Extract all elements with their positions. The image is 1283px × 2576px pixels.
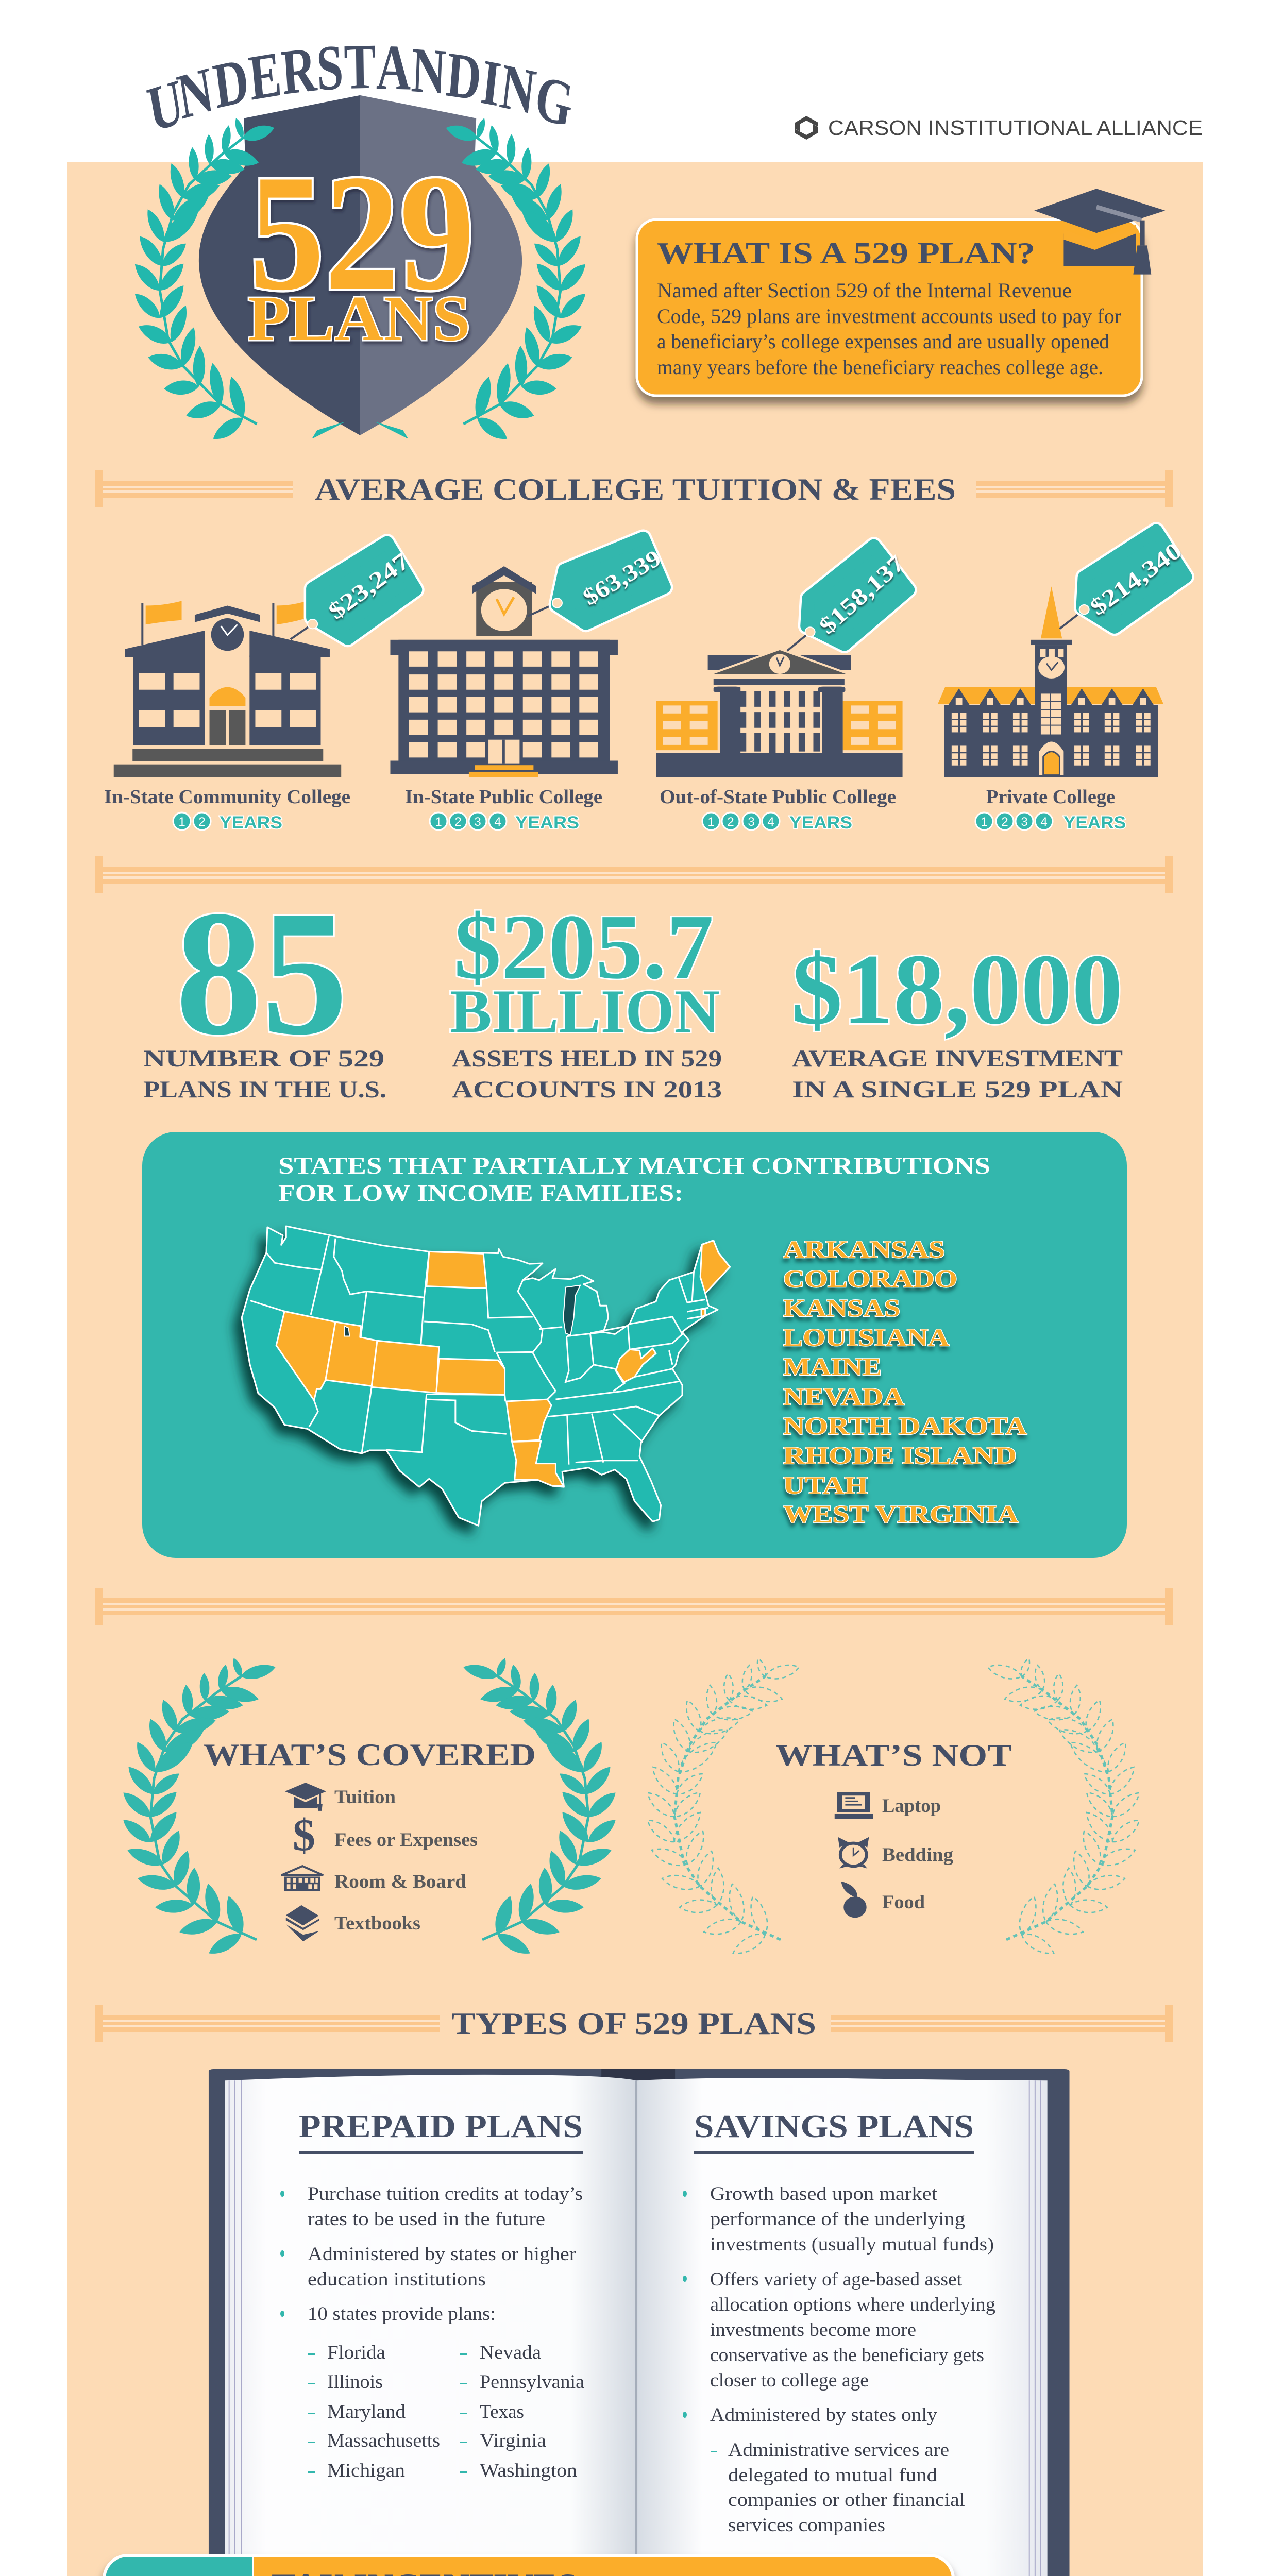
label: ACCOUNTS IN 2013 [452, 1076, 722, 1103]
price tag strings [291, 603, 1084, 651]
page: savings plans [683, 2109, 995, 2536]
divider [95, 470, 1173, 507]
list text: Purchase tuition credits at today’s [308, 2183, 583, 2205]
title badge: Understanding 529 Plans [131, 30, 589, 445]
state borders [250, 1236, 708, 1465]
price tag: $23,247: $23,247 [323, 547, 414, 624]
price tag: $158,137 [805, 546, 909, 645]
list text: Growth based upon market [710, 2183, 938, 2205]
list text: performance of the underlying [710, 2209, 965, 2230]
callout box [637, 219, 1142, 396]
icon: alarm clock [838, 1837, 869, 1869]
body text: a beneficiary’s college expenses and are usually opened [657, 330, 1109, 353]
panel: states map [142, 1132, 1127, 1558]
title number: 529: 529 [249, 140, 475, 325]
box [104, 2555, 953, 2576]
price tag: $63,339 [552, 538, 665, 623]
label: ASSETS HELD IN 529 [452, 1045, 722, 1072]
logo wordmark: CARSON INSTITUTIONAL ALLIANCE [828, 116, 1203, 140]
laurel wreath [131, 117, 589, 445]
section heading: average college tuition and fees [95, 470, 1173, 507]
state plan list: Nevada [480, 2342, 541, 2363]
shield [199, 95, 522, 435]
heading: SAVINGS PLANS [694, 2109, 974, 2144]
body text: Code, 529 plans are investment accounts used to pay for [657, 304, 1121, 328]
years indicators: 3 [1021, 815, 1028, 829]
big number: $18,000 [791, 934, 1123, 1045]
years indicators [173, 812, 1126, 833]
list text: companies or other financial [728, 2489, 965, 2511]
list text: services companies [728, 2515, 885, 2536]
years indicators: 1 [435, 815, 442, 829]
panel: what's not covered [644, 1657, 1143, 1958]
state plan list: Illinois [327, 2371, 383, 2393]
panel: what's covered [120, 1657, 619, 1958]
state list: LOUISIANA [783, 1324, 949, 1351]
item: Bedding: Bedding [882, 1844, 954, 1866]
years indicators: 4 [1040, 815, 1048, 829]
heading: WHAT’S NOT [775, 1738, 1012, 1772]
unit: BILLION [450, 977, 720, 1045]
icon: building [281, 1866, 323, 1891]
college labels: Out-of-State Public College [660, 786, 896, 808]
big number: $205.7 [454, 895, 714, 998]
label [792, 1045, 1123, 1103]
icon: graduation cap [285, 1783, 326, 1811]
statistic: 85 plans [143, 874, 386, 1103]
bullets [280, 2191, 284, 2317]
list text: Administrative services are [728, 2439, 949, 2461]
item: Room and Board: Room & Board [334, 1871, 466, 1892]
body text: Named after Section 529 of the Internal Revenue [657, 279, 1072, 302]
big number: 85 [176, 874, 348, 1072]
label: NUMBER OF 529 [143, 1045, 384, 1072]
statistic: average investment [791, 934, 1123, 1103]
list text [308, 2183, 583, 2325]
list text: delegated to mutual fund [728, 2465, 938, 2486]
icon: graduation cap [1034, 189, 1165, 275]
state plan list: Washington [480, 2460, 577, 2481]
building: in-state public college [390, 566, 618, 777]
item: Food: Food [882, 1892, 925, 1913]
highlighted states [276, 1241, 730, 1486]
panel heading [278, 1153, 990, 1207]
list text: Administered by states or higher [308, 2244, 576, 2265]
list text [710, 2183, 995, 2536]
state list: COLORADO [783, 1265, 957, 1293]
state plan list: Virginia [480, 2430, 546, 2451]
icon: textbooks [286, 1905, 319, 1941]
label: AVERAGE INVESTMENT [792, 1045, 1123, 1072]
state plan list: Massachusetts [327, 2430, 440, 2451]
state plan list [308, 2342, 584, 2481]
title word: Plans: PLANS [248, 283, 470, 354]
body text [657, 279, 1121, 379]
state list: NEVADA [783, 1383, 904, 1411]
heading: PREPAID PLANS [299, 2109, 583, 2144]
list text: investments (usually mutual funds) [710, 2234, 994, 2255]
price tag: $214,340: $214,340 [1085, 537, 1187, 620]
state plan list: Pennsylvania [480, 2371, 584, 2393]
state plan list: Michigan [327, 2460, 405, 2481]
open book [209, 2069, 1070, 2576]
list text: investments become more [710, 2319, 916, 2341]
years indicators: 2 [727, 815, 734, 829]
college labels: In-State Community College [104, 786, 350, 808]
state list [783, 1236, 1027, 1528]
US map [242, 1226, 730, 1526]
divider: above statistics [95, 856, 1173, 893]
heading: WHAT’S COVERED [204, 1738, 536, 1772]
building: community college [114, 601, 341, 777]
years indicators: 1 [178, 815, 185, 829]
section heading: types of 529 plans [95, 2005, 1173, 2042]
list text: Administered by states only [710, 2404, 938, 2426]
years indicators: YEARS [789, 813, 852, 833]
price tag: $63,339: $63,339 [578, 545, 665, 611]
heading text: AVERAGE COLLEGE TUITION & FEES [315, 472, 956, 506]
college labels [104, 786, 1115, 808]
panel background [142, 1132, 1127, 1558]
state list: RHODE ISLAND [783, 1442, 1017, 1469]
years indicators: YEARS [1063, 813, 1126, 833]
divider [95, 2005, 1173, 2042]
icon: logo mark [795, 116, 818, 140]
state plan list: Texas [480, 2401, 524, 2422]
state list: WEST VIRGINIA [783, 1501, 1019, 1528]
list text: closer to college age [710, 2370, 869, 2391]
price tag: $23,247 [308, 543, 416, 638]
label [452, 1045, 722, 1103]
years indicators: 2 [198, 815, 206, 829]
state plan list: Maryland [327, 2401, 406, 2422]
state plan list: Florida [327, 2342, 385, 2363]
panel: what is a 529 plan [637, 189, 1165, 396]
years indicators: 2 [454, 815, 462, 829]
title: Understanding: UNDERSTANDING [143, 30, 578, 146]
price tag: $158,137: $158,137 [814, 550, 909, 639]
list text: education institutions [308, 2269, 486, 2290]
years indicators: 4 [767, 815, 774, 829]
item: Textbooks: Textbooks [334, 1913, 420, 1934]
heading: WHAT IS A 529 PLAN? [657, 236, 1035, 270]
panel heading: FOR LOW INCOME FAMILIES: [278, 1180, 683, 1207]
icon: apple [841, 1882, 867, 1918]
state list: KANSAS [783, 1295, 900, 1322]
list text: 10 states provide plans: [308, 2303, 496, 2325]
state list: ARKANSAS [783, 1236, 945, 1263]
list text: rates to be used in the future [308, 2209, 545, 2230]
price tag: $214,340 [1079, 531, 1187, 627]
years indicators: 2 [1001, 815, 1008, 829]
icon: dollar: $ [293, 1810, 315, 1860]
label: IN A SINGLE 529 PLAN [792, 1076, 1123, 1103]
years indicators: 3 [748, 815, 755, 829]
list text: allocation options where underlying [710, 2294, 995, 2315]
icon: laptop [835, 1792, 873, 1819]
dashed wreath [644, 1657, 1143, 1958]
item: Laptop: Laptop [882, 1795, 941, 1817]
years indicators: 1 [707, 815, 715, 829]
years indicators: 4 [494, 815, 501, 829]
years indicators: 1 [981, 815, 988, 829]
logo: Carson Institutional Alliance [795, 116, 1203, 140]
book cover [209, 2069, 1070, 2576]
laurel wreath [120, 1657, 619, 1958]
building: out-of-state public college [656, 649, 903, 777]
item: Tuition: Tuition [334, 1787, 396, 1808]
bullets [683, 2191, 717, 2452]
state list: UTAH [783, 1472, 868, 1499]
heading text: TYPES OF 529 PLANS [451, 2007, 816, 2041]
label: PLANS IN THE U.S. [143, 1076, 386, 1103]
list text: Offers variety of age-based asset [710, 2269, 963, 2290]
divider: above coverage [95, 1588, 1173, 1625]
college labels: Private College [986, 786, 1115, 808]
years indicators: YEARS [220, 813, 282, 833]
statistic: 205.7 billion [450, 895, 722, 1103]
list text: conservative as the beneficiary gets [710, 2345, 984, 2366]
building: private college [938, 586, 1163, 777]
label [143, 1045, 386, 1103]
panel: tax incentives [104, 2555, 953, 2576]
panel heading: STATES THAT PARTIALLY MATCH CONTRIBUTIONS [278, 1153, 990, 1179]
Lake Michigan [563, 1285, 580, 1335]
state list: MAINE [783, 1353, 882, 1381]
page: prepaid plans [280, 2109, 584, 2481]
college labels: In-State Public College [405, 786, 602, 808]
body text: many years before the beneficiary reaches college age. [657, 355, 1103, 379]
years indicators: 3 [474, 815, 481, 829]
item: Fees or Expenses: Fees or Expenses [334, 1829, 478, 1851]
state list: NORTH DAKOTA [783, 1413, 1027, 1440]
years indicators: YEARS [515, 813, 579, 833]
